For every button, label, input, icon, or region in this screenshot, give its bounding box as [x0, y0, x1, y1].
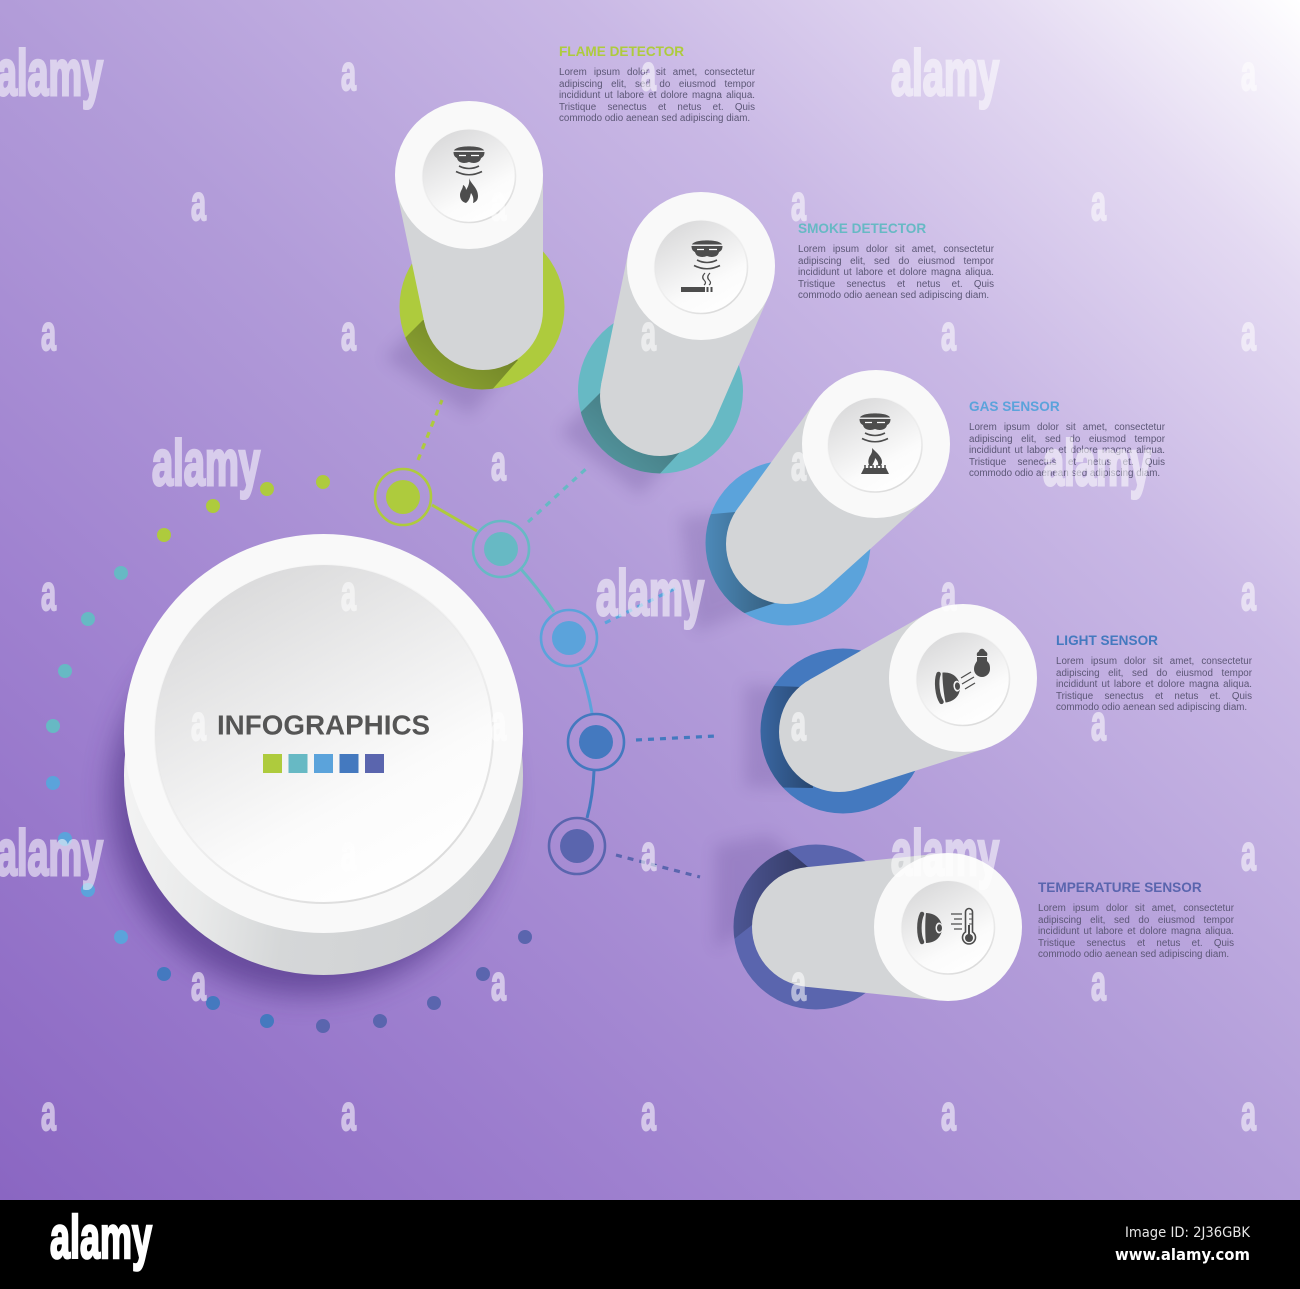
watermark overlay: a [41, 1085, 57, 1141]
text block: temperature sensor: Tristique senectus et netus et. Quis [1038, 938, 1234, 949]
cap inner face [422, 130, 516, 222]
text block: gas sensor: adipiscing elit, sed do eiusmod tempor [969, 434, 1165, 445]
cast shadow on disc [706, 512, 775, 613]
watermark overlay: alamy [0, 37, 103, 109]
cap inner face [902, 881, 994, 974]
watermark overlay: alamy [1043, 427, 1151, 499]
text block: light sensor [1056, 633, 1252, 713]
cap inner face [654, 220, 748, 314]
cylinder cap [627, 192, 775, 340]
text block: light sensor: commodo odio aenean sed adipiscing diam. [1056, 702, 1247, 713]
watermark overlay: a [1241, 565, 1257, 621]
watermark overlay: a [1241, 825, 1257, 881]
text block: smoke detector: Tristique senectus et netus et. Quis [798, 279, 994, 290]
watermark overlay: a [791, 435, 807, 491]
text block: light sensor: adipiscing elit, sed do eiusmod tempor [1056, 668, 1252, 679]
watermark overlay: a [491, 695, 507, 751]
text block: smoke detector [798, 221, 994, 301]
disc side wall [124, 576, 523, 975]
footer url: www.alamy.com [1115, 1245, 1250, 1264]
watermark overlay: a [1091, 175, 1107, 231]
watermark overlay: a [341, 565, 357, 621]
icon: light sensor [936, 649, 990, 703]
cylinder cap [889, 604, 1037, 752]
watermark overlay: a [341, 1085, 357, 1141]
soft ground shadow [680, 512, 775, 632]
cylinder body [752, 853, 940, 1001]
watermark overlay: alamy [0, 817, 103, 889]
central disc [111, 534, 523, 995]
cylinder cap [395, 101, 543, 249]
footer image id: Image ID: 2J36GBK [1125, 1225, 1251, 1241]
cylinder cap [802, 370, 950, 518]
text block: flame detector [559, 44, 755, 124]
text block: flame detector: Tristique senectus et netus et. Quis [559, 102, 755, 113]
text block: flame detector: adipiscing elit, sed do eiusmod tempor [559, 79, 755, 90]
watermark overlay: a [791, 955, 807, 1011]
text block: smoke detector: adipiscing elit, sed do eiusmod tempor [798, 256, 994, 267]
colour swatches [263, 754, 384, 773]
footer bar [50, 1204, 1251, 1272]
icon: gas sensor [860, 413, 890, 474]
text block: smoke detector: Lorem ipsum dolor sit amet, consectetur [798, 244, 994, 255]
text block: flame detector: commodo odio aenean sed adipiscing diam. [559, 113, 750, 124]
disc top face [124, 534, 523, 933]
icon: temperature sensor [919, 909, 976, 944]
coloured base disc [760, 648, 926, 814]
cylinder body [726, 400, 926, 604]
cylinder: light sensor [745, 604, 1037, 814]
watermark overlay: a [341, 825, 357, 881]
coloured base disc [400, 224, 564, 390]
cast shadow on disc [760, 686, 813, 788]
disc inner face [155, 565, 493, 903]
text block: smoke detector: SMOKE DETECTOR [798, 221, 926, 236]
cylinder: flame detector [385, 101, 564, 415]
cylinder: gas sensor [680, 370, 950, 632]
watermark overlay: alamy [891, 37, 999, 109]
cast shadow on disc [406, 320, 518, 390]
coloured base disc [578, 308, 743, 474]
footer logo: alamy [50, 1204, 152, 1271]
text block: temperature sensor: Lorem ipsum dolor sit amet, consectetur [1038, 903, 1234, 914]
watermark overlay: a [941, 1085, 957, 1141]
text block: gas sensor: Lorem ipsum dolor sit amet, consectetur [969, 422, 1165, 433]
watermark overlay: a [1091, 955, 1107, 1011]
text block: flame detector: incididunt ut labore et dolore magna aliqua. [559, 90, 755, 101]
watermark overlay: a [791, 175, 807, 231]
watermark overlay: a [41, 565, 57, 621]
watermark overlay: alamy [152, 427, 260, 499]
text block: temperature sensor: adipiscing elit, sed do eiusmod tempor [1038, 915, 1234, 926]
text block: gas sensor [969, 399, 1165, 479]
watermark overlay: alamy [891, 817, 999, 889]
text block: gas sensor: GAS SENSOR [969, 399, 1060, 414]
watermark overlay: alamy [596, 557, 704, 629]
text block: light sensor: incididunt ut labore et dolore magna aliqua. [1056, 679, 1252, 690]
coloured base disc [734, 844, 898, 1010]
watermark overlay: a [1241, 45, 1257, 101]
text block: temperature sensor: incididunt ut labore et dolore magna aliqua. [1038, 926, 1234, 937]
cast shadow on disc [581, 393, 680, 474]
text block: flame detector: Lorem ipsum dolor sit amet, consectetur [559, 67, 755, 78]
disc drop shadow [111, 601, 505, 995]
soft ground shadow [745, 685, 813, 788]
icon: smoke detector [681, 240, 722, 292]
cylinder: smoke detector [560, 192, 775, 495]
text block: light sensor: Tristique senectus et netus et. Quis [1056, 691, 1252, 702]
coloured base disc [706, 460, 870, 626]
cast shadow on disc [734, 850, 808, 938]
text block: gas sensor: incididunt ut labore et dolore magna aliqua. [969, 445, 1165, 456]
watermark overlay: a [491, 955, 507, 1011]
disc title: INFOGRAPHICS [217, 710, 430, 740]
timeline nodes [375, 469, 624, 874]
text block: temperature sensor [1038, 880, 1234, 960]
watermark overlay: a [41, 305, 57, 361]
watermark overlay: a [791, 695, 807, 751]
cylinder cap [874, 853, 1022, 1001]
dotted ring around disc [46, 475, 532, 1033]
main graphics [46, 101, 1037, 1033]
text block: flame detector: FLAME DETECTOR [559, 44, 684, 59]
watermark overlay: a [641, 1085, 657, 1141]
watermark overlay: a [941, 305, 957, 361]
soft ground shadow [560, 393, 682, 495]
dashed leader lines [418, 400, 716, 877]
icon: flame detector [454, 146, 484, 203]
cylinder body [779, 614, 985, 792]
watermark overlay: a [191, 175, 207, 231]
text block: gas sensor: Tristique senectus et netus et. Quis [969, 457, 1165, 468]
timeline connectors [432, 505, 594, 818]
watermark overlay: a [341, 45, 357, 101]
watermark overlay: a [341, 305, 357, 361]
text block: gas sensor: commodo odio aenean sed adipiscing diam. [969, 468, 1160, 479]
watermark overlay: a [1241, 1085, 1257, 1141]
text block: temperature sensor: TEMPERATURE SENSOR [1038, 880, 1202, 895]
watermark overlay: a [191, 955, 207, 1011]
cylinder body [397, 175, 543, 370]
watermark overlay: a [641, 305, 657, 361]
cylinder: temperature sensor [715, 835, 1022, 1010]
watermark overlay: a [191, 695, 207, 751]
watermark overlay: a [641, 825, 657, 881]
watermark overlay: a [491, 435, 507, 491]
watermark overlay: a [641, 45, 657, 101]
soft ground shadow [385, 320, 518, 415]
watermark overlay: a [1091, 695, 1107, 751]
text block: smoke detector: commodo odio aenean sed adipiscing diam. [798, 290, 989, 301]
cap inner face [828, 398, 922, 492]
watermark overlay: a [1241, 305, 1257, 361]
text block: temperature sensor: commodo odio aenean sed adipiscing diam. [1038, 949, 1229, 960]
watermark overlay: a [941, 565, 957, 621]
text block: smoke detector: incididunt ut labore et dolore magna aliqua. [798, 267, 994, 278]
soft ground shadow [715, 835, 808, 950]
text block: light sensor: Lorem ipsum dolor sit amet, consectetur [1056, 656, 1252, 667]
cylinder body [600, 251, 769, 456]
cap inner face [916, 632, 1010, 726]
text block: light sensor: LIGHT SENSOR [1056, 633, 1158, 648]
watermark overlay: a [491, 175, 507, 231]
